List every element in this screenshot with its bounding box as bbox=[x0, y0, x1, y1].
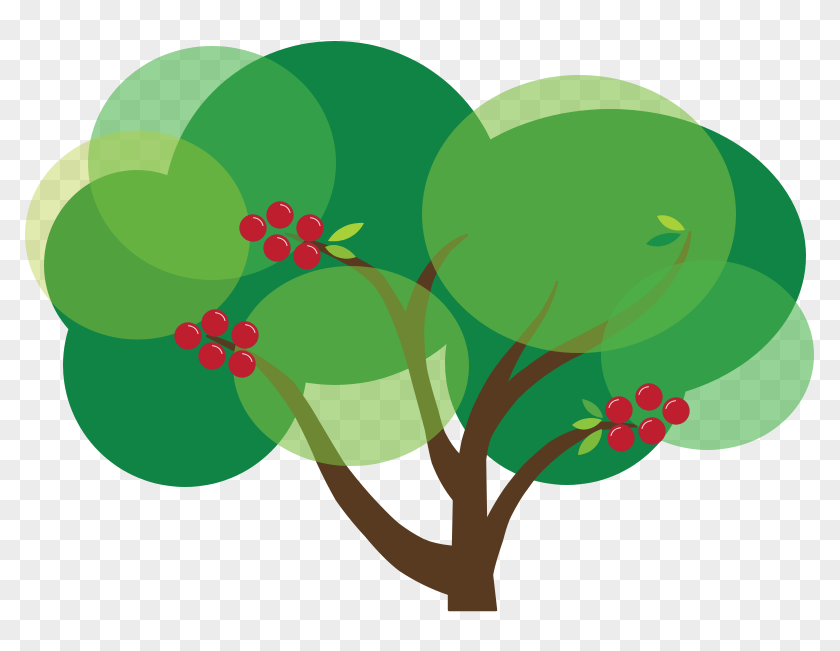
foliage: large right ellipse bbox=[422, 75, 736, 353]
berry cluster: right bbox=[572, 383, 690, 455]
leaf: mid green bbox=[582, 399, 603, 418]
canopy: dark green base bbox=[44, 41, 806, 487]
foliage: lower right circle bbox=[601, 260, 814, 450]
trunk with central and right branches bbox=[449, 232, 690, 610]
leaf: dark bbox=[646, 233, 681, 246]
leaf: olive bbox=[325, 245, 356, 259]
leaves: upper right branch tip bbox=[646, 215, 685, 246]
berry cluster: left top bbox=[239, 201, 364, 270]
foliage: upper left circle bbox=[88, 46, 336, 280]
tree trunk and branches bbox=[207, 232, 690, 610]
branch: middle with offshoot bbox=[286, 234, 470, 520]
leaf: yellow-green bbox=[328, 223, 364, 241]
foliage: left yellow-green circle bbox=[25, 130, 250, 340]
branch: lower left bbox=[207, 336, 465, 600]
leaf: light green bbox=[572, 418, 602, 430]
leaf: green bbox=[578, 429, 602, 455]
leaf: light bbox=[657, 215, 685, 230]
canopy: translucent foliage circles bbox=[25, 46, 814, 466]
berry cluster: left lower bbox=[174, 309, 259, 378]
foliage: lower centre circle bbox=[233, 266, 469, 466]
